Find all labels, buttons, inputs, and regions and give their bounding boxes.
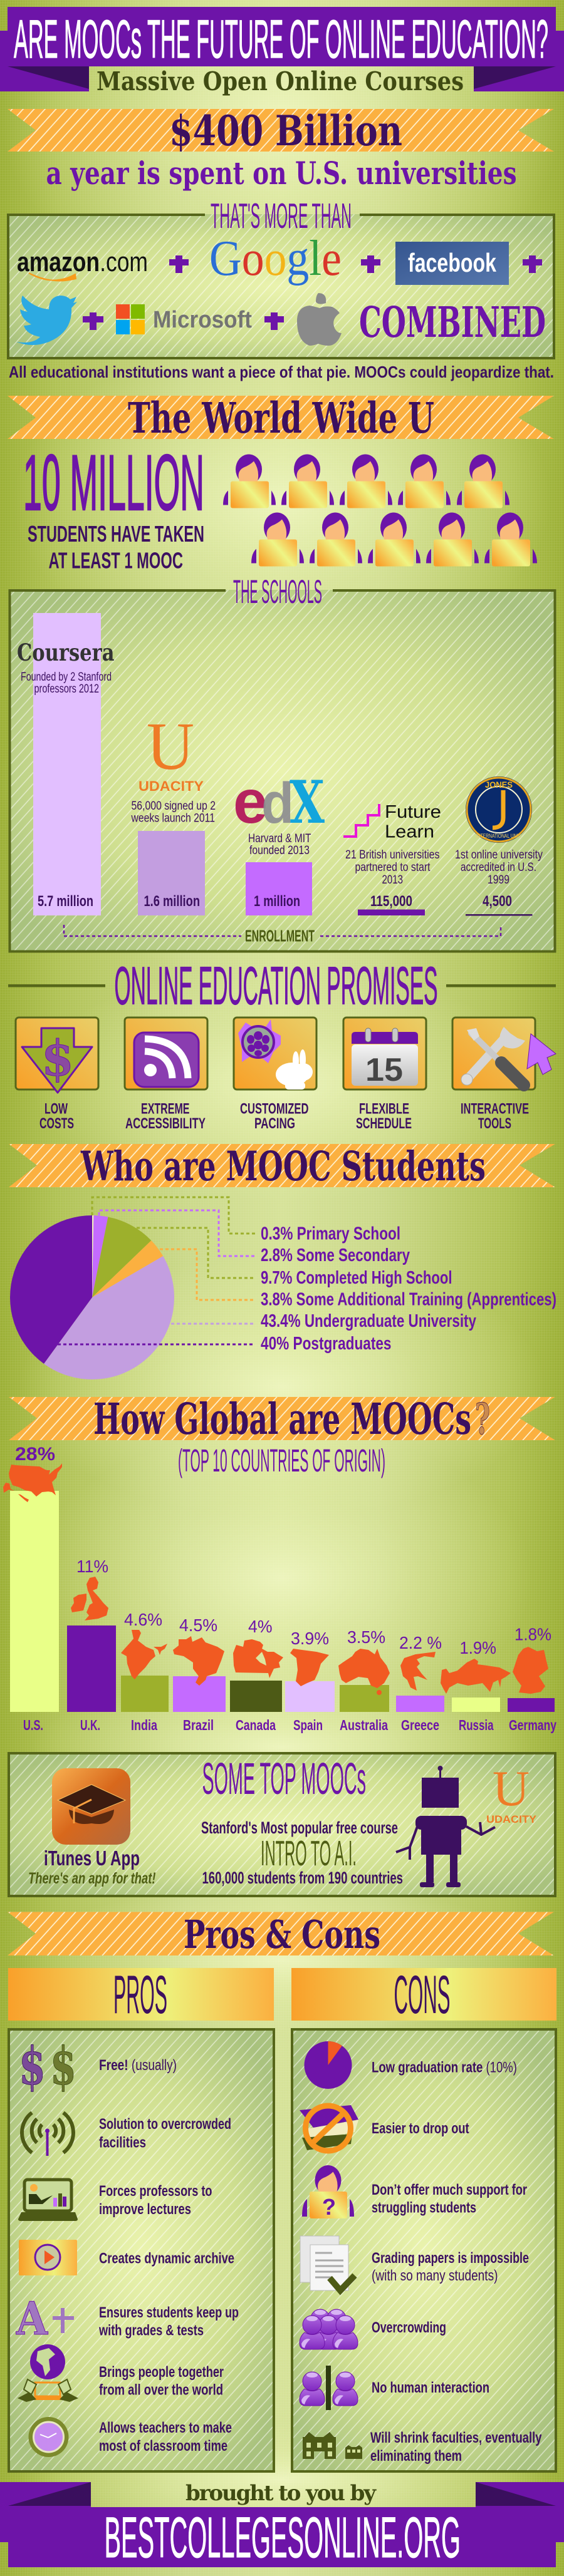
promise: interactive tools: INTERACTIVE [461, 1101, 529, 1117]
text: stanford: Stanford's Most popular free course [201, 1818, 398, 1837]
country: australia: 3.5% [347, 1627, 385, 1647]
bar: edx: founded 2013 [249, 844, 310, 857]
logo: facebook [395, 242, 509, 285]
bar: jones international university: 1st online university [455, 848, 543, 862]
pro: free [19, 2036, 177, 2096]
country: canada: Canada [236, 1717, 276, 1733]
bar chart: countries [3, 1444, 556, 1733]
text: 10 MILLION [23, 440, 204, 527]
bar: jones international university: accredited in U.S. [461, 861, 536, 874]
icon: robot [396, 1766, 495, 1887]
bar: future learn: 115,000 [370, 893, 412, 910]
icons: students with laptops [223, 455, 537, 566]
con: no human interaction: No human interaction [372, 2379, 489, 2396]
text: app for that: There's an app for that! [28, 1870, 155, 1887]
country: uk: 11% [76, 1557, 108, 1576]
bar: edx: d [261, 771, 294, 835]
pro: classroom time: Allows teachers to make [99, 2419, 232, 2436]
bar: edx: e [233, 767, 268, 836]
con: overcrowding [300, 2309, 446, 2349]
panel: pros [9, 2029, 274, 2471]
country: greece: Greece [401, 1717, 439, 1733]
pro: free: $ [19, 2036, 46, 2096]
bar: future learn: 2013 [382, 873, 403, 887]
header: cons [291, 1965, 556, 2025]
con: shrink faculties: eliminating them [370, 2448, 462, 2465]
logo: microsoft [116, 304, 252, 334]
subtitle: Massive Open Online Courses [97, 66, 464, 96]
title banner [0, 7, 564, 91]
pro: grades: with grades & tests [98, 2322, 204, 2339]
con: struggling students [302, 2165, 527, 2220]
pro: overcrowded facilities [22, 2113, 231, 2156]
con: graduation rate [305, 2041, 517, 2089]
pro: classroom time: most of classroom time [99, 2438, 227, 2455]
pie legend: 40% Postgraduates [261, 1334, 391, 1354]
footer banner [0, 2481, 564, 2570]
pro: free: $ [50, 2036, 76, 2096]
icon: turtle [238, 1019, 281, 1063]
pie legend: 0.3% Primary School [261, 1224, 400, 1244]
promise: customized pacing [234, 1018, 316, 1132]
bar: future learn: partnered to start [355, 861, 431, 874]
bar: future learn: Learn [385, 822, 434, 842]
text: students have taken: STUDENTS HAVE TAKEN [28, 521, 204, 547]
bar: jones international university: JONES [485, 780, 513, 790]
pro: improve lectures: Forces professors to [99, 2183, 212, 2200]
bar: udacity: U [147, 709, 194, 784]
ribbon: $400 billion [8, 106, 554, 155]
country: australia: Australia [340, 1717, 388, 1733]
logo: twitter [16, 296, 77, 345]
country: germany: 1.8% [514, 1624, 551, 1644]
promise: flexible schedule: FLEXIBLE [359, 1101, 409, 1117]
promise: interactive tools [452, 1018, 556, 1132]
panel: cons [292, 2029, 556, 2471]
panel: some top moocs [9, 1753, 555, 1896]
plus [523, 255, 542, 273]
pro: overcrowded facilities: Solution to overcrowded [99, 2116, 231, 2133]
bar: coursera: 5.7 million [38, 893, 93, 910]
bar: edx: Harvard & MIT [248, 832, 311, 845]
header: pros [8, 1965, 274, 2025]
bar: udacity: 56,000 signed up 2 [132, 800, 216, 813]
country: russia [441, 1638, 511, 1733]
bar: jones international university: 4,500 [483, 893, 512, 910]
country: spain: 3.9% [291, 1629, 329, 1648]
panel: companies [8, 196, 555, 359]
logo: google: Google [209, 231, 342, 286]
bar: coursera: Founded by 2 Stanford [21, 671, 112, 684]
promise: extreme accessibility: EXTREME [141, 1101, 189, 1117]
promise: flexible schedule: 15 [365, 1052, 403, 1088]
logo: udacity small: UDACITY [486, 1813, 537, 1825]
bar: edx [233, 767, 325, 915]
promise: low costs: COSTS [39, 1115, 74, 1132]
con: no human interaction [300, 2366, 489, 2410]
logo: udacity small: U [493, 1761, 530, 1816]
bar: jones international university: 1999 [488, 873, 509, 887]
panel: companies: THAT'S MORE THAN [211, 196, 352, 236]
text: 160,000 students: 160,000 students from 190 countries [202, 1868, 403, 1887]
country: uk: U.K. [80, 1717, 100, 1733]
pro: free: Free! (usually) [99, 2057, 177, 2074]
country: spain [285, 1629, 335, 1733]
pro: improve lectures: improve lectures [99, 2201, 191, 2218]
pro: overcrowded facilities: facilities [99, 2134, 146, 2151]
pro: people together: Brings people together [99, 2364, 224, 2381]
country: us [3, 1444, 62, 1733]
ribbon: the world wide u: The World Wide U [128, 393, 434, 443]
pro: dynamic archive: Creates dynamic archive [99, 2250, 234, 2267]
promise: low costs: $ [41, 1030, 74, 1087]
plus [169, 255, 189, 273]
country: brazil [173, 1615, 226, 1733]
ribbon: pros and cons: Pros & Cons [184, 1912, 380, 1957]
country: canada: 4% [248, 1617, 272, 1636]
country: us: U.S. [23, 1717, 43, 1733]
con: drop out: Easier to drop out [372, 2120, 469, 2137]
bar: coursera: Coursera [17, 639, 115, 666]
logo: amazon: amazon.com [17, 247, 148, 277]
pie chart: student education [10, 1215, 174, 1379]
pie legend [261, 1224, 556, 1354]
country: us: 28% [15, 1444, 55, 1465]
ribbon: pros and cons [8, 1912, 554, 1957]
logo: udacity small [486, 1761, 537, 1825]
panel: the schools [9, 574, 556, 952]
bar: jones international university [455, 776, 543, 915]
country: canada [230, 1617, 283, 1733]
bar: udacity: 1.6 million [144, 893, 200, 910]
panel: some top moocs: INTRO TO A.I. [261, 1833, 357, 1873]
pie legend: 2.8% Some Secondary [261, 1245, 410, 1265]
pro: grades: Ensures students keep up [99, 2304, 239, 2321]
text: students have taken: AT LEAST 1 MOOC [49, 547, 183, 574]
pro: people together [18, 2344, 224, 2402]
country: germany [508, 1624, 556, 1733]
plus [361, 255, 380, 273]
plus [83, 312, 103, 330]
pie leaders [58, 1197, 255, 1344]
promise: flexible schedule: SCHEDULE [356, 1115, 412, 1132]
bar: edx: 1 million [254, 893, 300, 910]
promise: customized pacing: CUSTOMIZED [240, 1101, 308, 1117]
logo: microsoft: Microsoft [153, 307, 252, 333]
country: greece [396, 1633, 444, 1733]
bar: edx: X [290, 768, 325, 837]
pro: people together: from all over the world [99, 2382, 223, 2398]
con: shrink faculties [303, 2429, 542, 2465]
icon: rabbit [276, 1049, 313, 1090]
con: struggling students: ? [322, 2194, 336, 2220]
text: brought to you by: brought to you by [185, 2481, 377, 2506]
bar: jones international university: INTERNATIONAL UNIV. [476, 833, 521, 839]
bar: coursera [17, 613, 115, 915]
bar: udacity: weeks launch 2011 [131, 811, 215, 825]
promise: low costs [16, 1018, 98, 1132]
bar: future learn: Future [385, 802, 441, 822]
country: india: India [131, 1717, 157, 1733]
promise: flexible schedule [343, 1018, 426, 1132]
con: overcrowding: Overcrowding [372, 2319, 446, 2336]
promise: interactive tools: TOOLS [478, 1115, 511, 1132]
pro: grades: A [16, 2292, 48, 2345]
promise: low costs: LOW [44, 1101, 68, 1117]
country: india [121, 1610, 169, 1733]
promise: extreme accessibility [125, 1018, 207, 1132]
pie legend: 43.4% Undergraduate University [261, 1311, 476, 1331]
country: brazil: 4.5% [179, 1615, 217, 1635]
ribbon: how global are moocs: ? [475, 1394, 490, 1445]
pro: improve lectures [18, 2180, 212, 2221]
country: russia: 1.9% [460, 1638, 496, 1657]
con: drop out [300, 2105, 469, 2151]
bar: coursera: professors 2012 [34, 683, 99, 696]
panel: the schools: THE SCHOOLS [233, 574, 322, 611]
country: russia: Russia [459, 1717, 494, 1733]
country: brazil: Brazil [183, 1717, 214, 1733]
country: australia [338, 1627, 390, 1733]
logo: apple [297, 293, 342, 346]
ribbon: $400 billion: $400 Billion [169, 106, 402, 155]
icon: itunes u [52, 1768, 130, 1845]
pro: classroom time [29, 2417, 232, 2457]
pro: dynamic archive [19, 2240, 234, 2275]
con: struggling students: struggling students [372, 2199, 476, 2217]
pie legend: 9.7% Completed High School [261, 1268, 452, 1288]
bar: future learn [343, 802, 441, 915]
header: pros: PROS [113, 1965, 167, 2025]
country: greece: 2.2 % [399, 1633, 442, 1652]
bar: future learn: 21 British universities [345, 848, 440, 862]
con: grading papers [300, 2236, 529, 2290]
text: itunes u app: iTunes U App [44, 1847, 140, 1870]
text: students have taken [28, 521, 204, 574]
header: cons: CONS [394, 1965, 450, 2025]
promise: customized pacing: PACING [254, 1115, 295, 1132]
con: graduation rate: Low graduation rate (10%) [372, 2059, 517, 2076]
bar: udacity [131, 709, 216, 915]
country: spain: Spain [293, 1717, 323, 1733]
enrollment bracket [64, 925, 501, 945]
country: uk [67, 1557, 116, 1733]
country: india: 4.6% [124, 1610, 162, 1629]
logo: facebook: facebook [408, 248, 496, 277]
pro: grades [16, 2292, 239, 2345]
promise: extreme accessibility: ACCESSIBILITY [125, 1115, 206, 1132]
con: grading papers: (with so many students) [372, 2267, 498, 2284]
plus [264, 312, 284, 330]
enrollment bracket: ENROLLMENT [245, 927, 315, 945]
bar: udacity: UDACITY [138, 778, 204, 794]
